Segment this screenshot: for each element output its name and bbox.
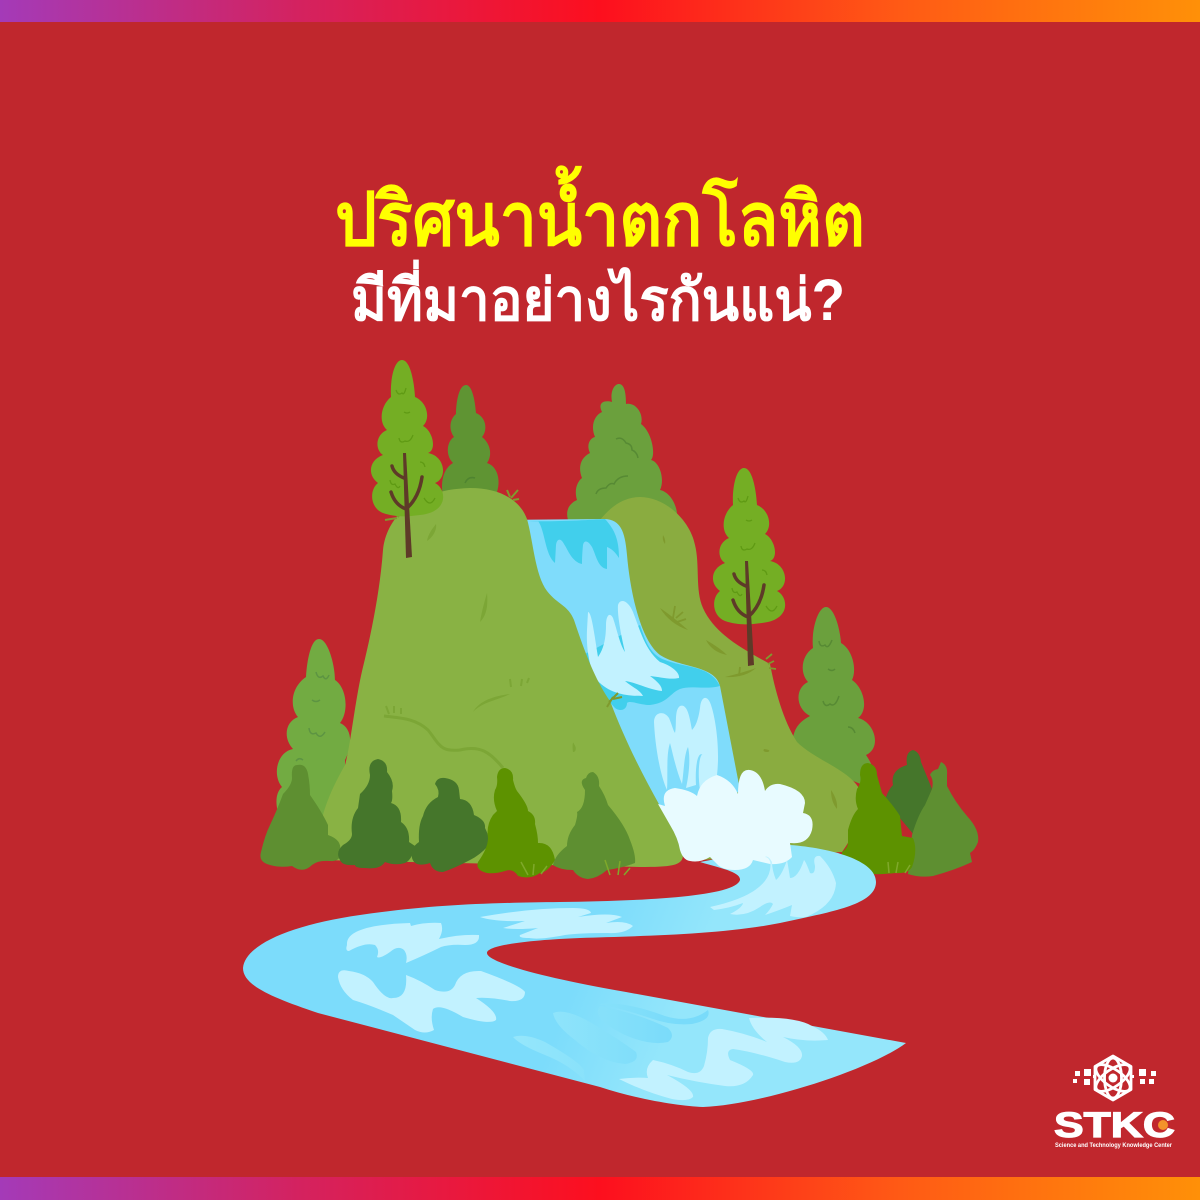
river: ripple left upper bbox=[346, 923, 479, 963]
hill: main hill bbox=[319, 488, 683, 867]
bottom gradient bar bbox=[0, 1177, 1200, 1200]
title line 1: ปริศนาน้ำตกโลหิต bbox=[335, 165, 865, 261]
tree: large back tree centre bbox=[567, 384, 677, 525]
bush: dark middle bbox=[412, 778, 489, 872]
bush: olive centre bbox=[553, 772, 635, 879]
waterfall: top dark band bbox=[528, 519, 619, 569]
river: ripple lower right bbox=[619, 1018, 828, 1100]
tree: foreground left tree with trunk bbox=[371, 360, 443, 558]
logo: left pixel squares bbox=[1073, 1069, 1096, 1085]
title line 2: มีที่มาอย่างไรกันแน่? bbox=[351, 259, 845, 333]
STKC logo bbox=[1054, 1056, 1175, 1149]
logo: right pixel squares bbox=[1131, 1069, 1156, 1084]
bush: olive far right bbox=[908, 762, 978, 877]
waterfall: upper foam streaks bbox=[587, 601, 679, 696]
river: foam ripple near splash bbox=[710, 856, 836, 917]
bush: dark left bbox=[338, 759, 415, 868]
river: ripple upper middle bbox=[480, 908, 633, 939]
logo: atom emblem bbox=[1092, 1056, 1134, 1100]
bush: dark right back bbox=[885, 750, 932, 835]
hill: right hill bbox=[600, 497, 861, 860]
river bbox=[243, 845, 906, 1107]
bush: bright green middle bbox=[477, 768, 555, 877]
river: ripple left lower bbox=[338, 970, 525, 1032]
hill marks: main hill path and grass bbox=[384, 490, 633, 864]
illustration: waterfall landscape bbox=[243, 360, 978, 1107]
logo: STKC wordmark: STKC bbox=[1054, 1106, 1175, 1145]
river: soft streaks bbox=[513, 1004, 709, 1081]
tree: right background tree bbox=[793, 607, 876, 790]
bush: bright green right bbox=[840, 763, 915, 874]
tree: lower-left background tree bbox=[276, 639, 350, 830]
waterfall: water body bbox=[500, 519, 740, 850]
tree: foreground right tree with trunk bbox=[713, 468, 785, 666]
bush: far left bbox=[260, 765, 340, 870]
logo: orange dot bbox=[1158, 1120, 1168, 1130]
title bbox=[335, 165, 865, 333]
hill marks: right hill grass bbox=[660, 535, 837, 809]
logo: tagline: Science and Technology Knowledge Center bbox=[1055, 1143, 1173, 1149]
waterfall: mid ledge bbox=[583, 625, 720, 710]
waterfall: lower foam streaks bbox=[654, 698, 718, 790]
tree: back dark behind main hill bbox=[442, 385, 499, 500]
top gradient bar bbox=[0, 0, 1200, 22]
waterfall splash foam bbox=[658, 770, 813, 870]
